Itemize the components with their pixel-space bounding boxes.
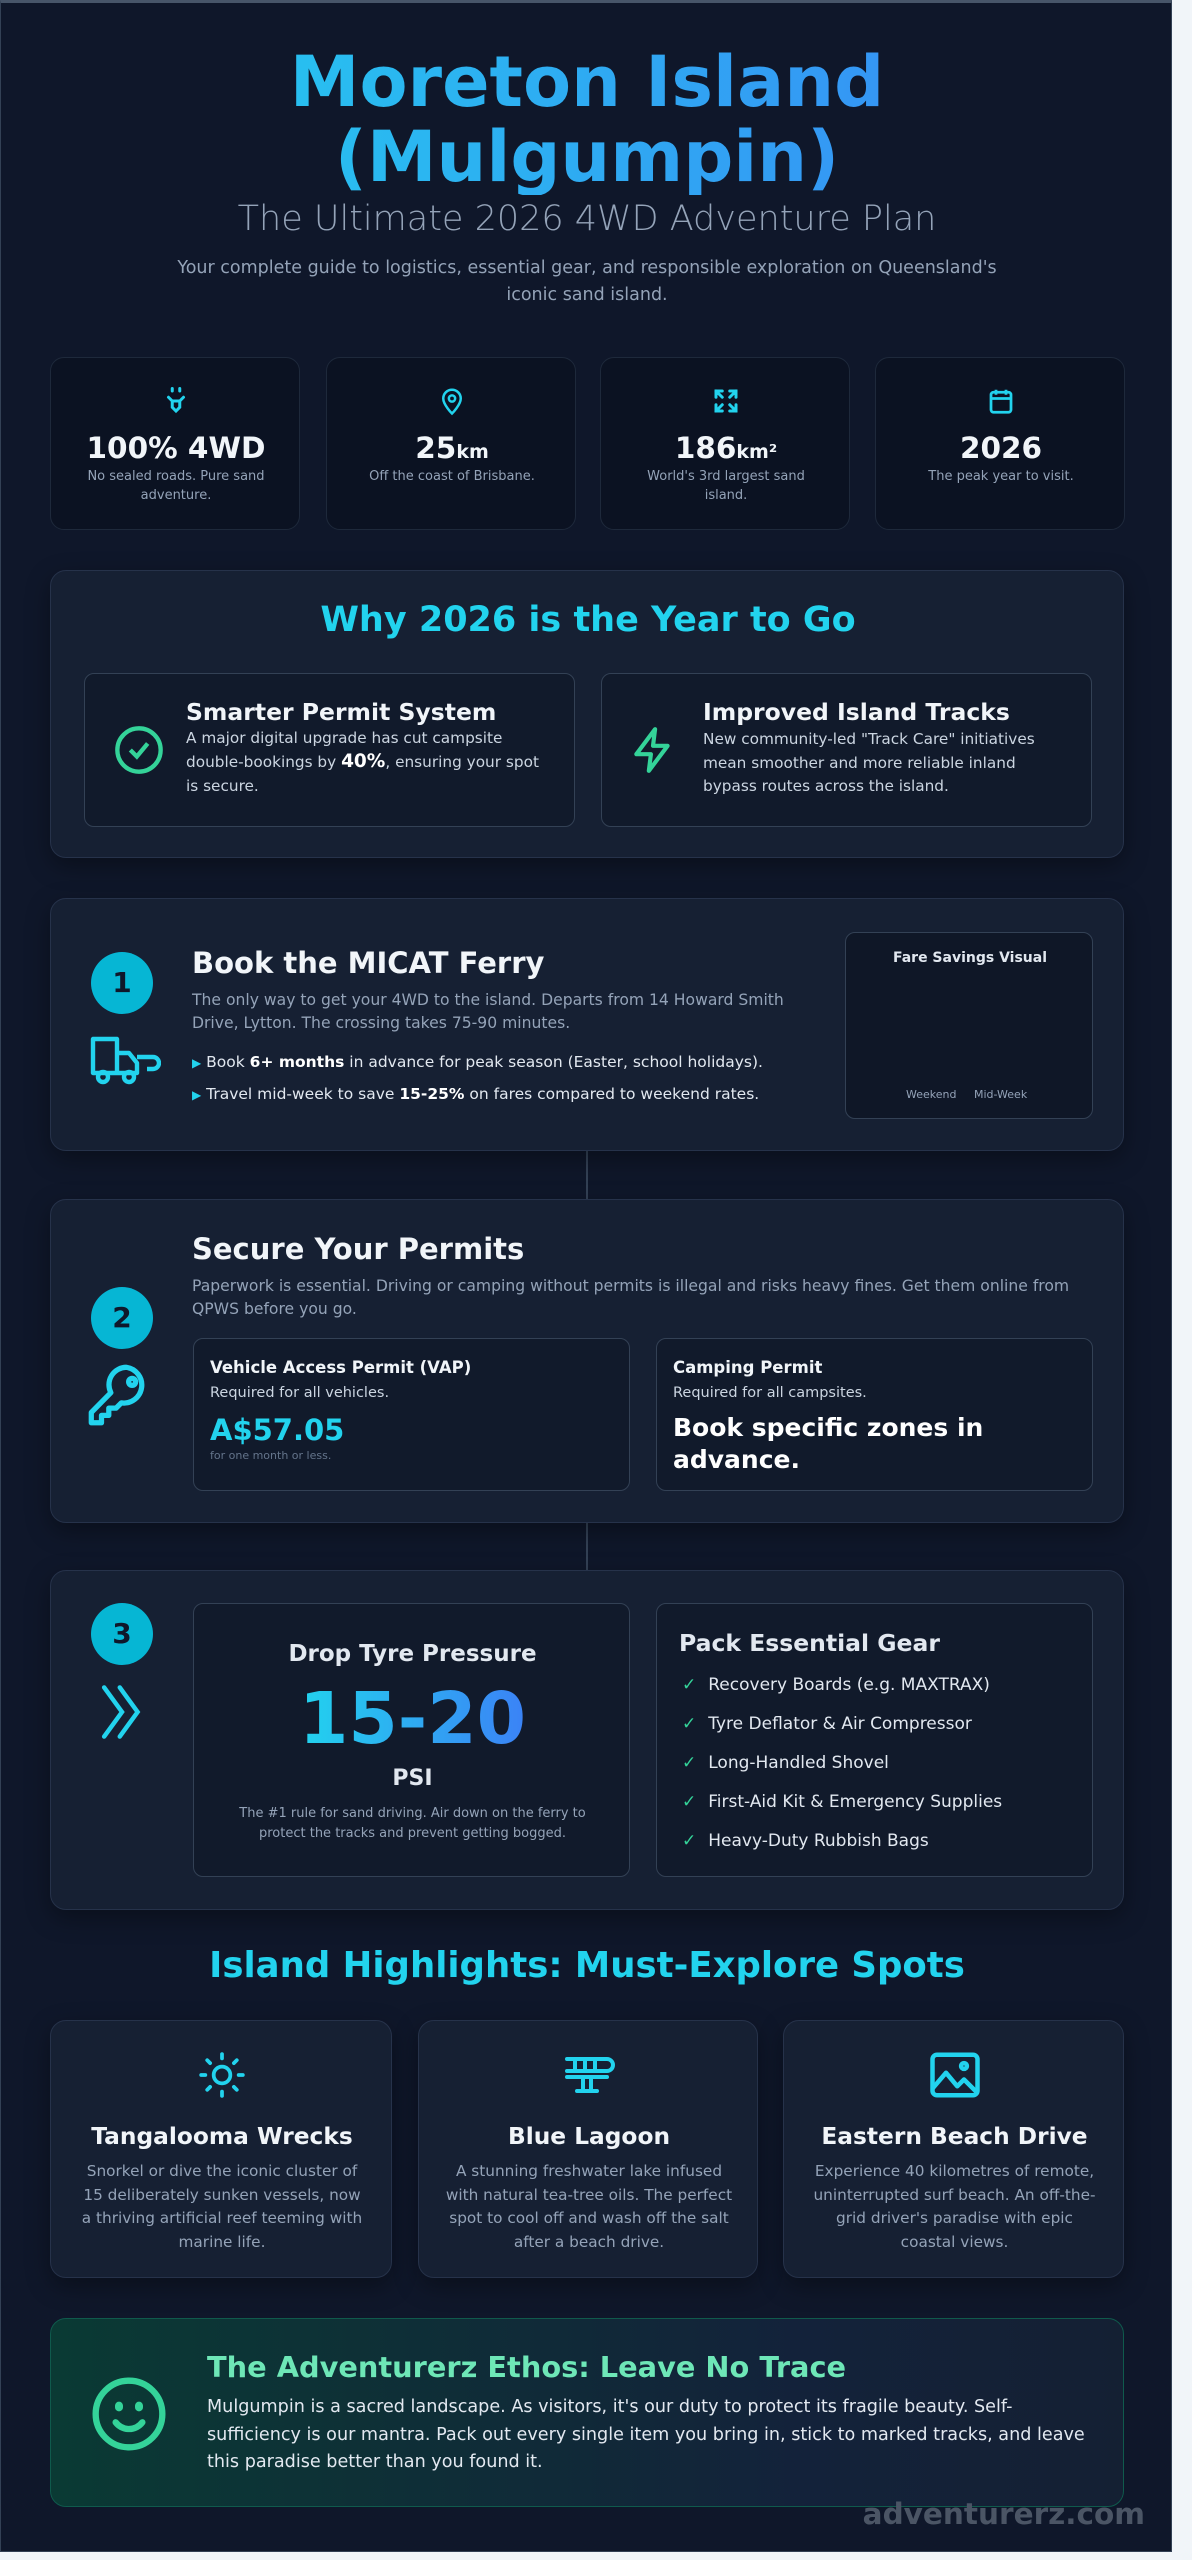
icon: jetty	[565, 2057, 615, 2093]
step number 3: 3	[112, 1617, 132, 1650]
box: gear list: ✓ Recovery Boards (e.g. MAXTRAX)	[682, 1675, 990, 1695]
box: improved tracks	[601, 673, 1092, 827]
stat card: 186km2: World's 3rd largest sand island.	[647, 469, 805, 503]
stat card: 2026: 2026	[960, 431, 1042, 465]
card: Blue Lagoon: Blue Lagoon	[508, 2123, 670, 2150]
box: tyre pressure: PSI	[392, 1766, 433, 1791]
big number: 15-20	[299, 1677, 526, 1760]
icon: truck	[90, 1036, 161, 1084]
card: Tangalooma Wrecks	[50, 2020, 392, 2278]
bullets	[192, 1053, 763, 1103]
box: gear list: ✓ First-Aid Kit & Emergency Supplies	[682, 1792, 1002, 1812]
card: Tangalooma Wrecks: Tangalooma Wrecks	[91, 2123, 353, 2150]
chart: fare savings visual: Fare Savings Visual	[893, 950, 1047, 966]
stat card: 100% 4WD: 100% 4WD	[87, 431, 265, 465]
description: The only way to get your 4WD to the island. Departs from 14 Howard Smith Drive, Lytton. The crossing takes 75-90 minutes.	[192, 991, 784, 1032]
panel: step 2 permits	[50, 1199, 1124, 1523]
box: smarter permit: Smarter Permit System	[186, 698, 496, 726]
subtitle: The Ultimate 2026 4WD Adventure Plan	[238, 199, 936, 239]
box: VAP	[193, 1338, 630, 1491]
bullets: ▶ Book 6+ months in advance for peak season (Easter, school holidays).	[192, 1053, 763, 1071]
box: VAP: A$57.05	[210, 1413, 344, 1447]
stat card: 100% 4WD: No sealed roads. Pure sand adventure.	[87, 469, 265, 503]
box: smarter permit: A major digital upgrade has cut campsite double-bookings by 40%, ensuring your spot is secure.	[186, 729, 539, 795]
title	[1, 45, 1173, 195]
card: Blue Lagoon: A stunning freshwater lake infused with natural tea-tree oils. The perfect spot to cool off and wash off the salt after a beach drive.	[446, 2162, 732, 2250]
icon: calendar	[990, 390, 1012, 414]
stat card: 25km	[326, 357, 576, 530]
panel: ethos: The Adventurerz Ethos: Leave No Trace	[207, 2350, 846, 2384]
card: Tangalooma Wrecks: Snorkel or dive the iconic cluster of 15 deliberately sunken vessels, now a thriving artificial reef teeming with marine life.	[82, 2162, 362, 2250]
step number 2: 2	[112, 1301, 132, 1334]
box: gear list: ✓ Tyre Deflator & Air Compressor	[682, 1714, 972, 1734]
icon: expand	[714, 389, 738, 413]
icon: sun	[199, 2052, 245, 2098]
stat card: 25km: Off the coast of Brisbane.	[369, 469, 535, 484]
heading: Why 2026 is the Year to Go	[320, 600, 856, 640]
panel: step 3 tyres & gear	[50, 1570, 1124, 1910]
stat card: 2026	[875, 357, 1125, 530]
connector lines	[586, 1151, 588, 1199]
panel: ethos: Mulgumpin is a sacred landscape. As visitors, it's our duty to protect its fragile beauty. Self-sufficiency is our mantra. Pack out every single item you bring in, stick to marked tracks, and leave this paradise better than you found it.	[207, 2397, 1085, 2472]
box: gear list: Pack Essential Gear	[679, 1629, 940, 1657]
box: camping permit: Camping Permit	[673, 1358, 822, 1377]
box: tyre pressure	[193, 1603, 630, 1877]
card: Eastern Beach Drive	[783, 2020, 1124, 2278]
box: gear list	[656, 1603, 1093, 1877]
stat card: 186km2: 186km²	[675, 431, 777, 465]
title: (Mulgumpin)	[335, 116, 839, 198]
box: tyre pressure: The #1 rule for sand driving. Air down on the ferry to protect the tracks and prevent getting bogged.	[239, 1806, 586, 1841]
icon: key	[88, 1364, 144, 1426]
title: Moreton Island	[290, 41, 884, 123]
box: gear list: ✓ Heavy-Duty Rubbish Bags	[682, 1831, 929, 1851]
icon: check circle	[115, 726, 163, 774]
box: improved tracks: Improved Island Tracks	[703, 698, 1010, 726]
box: camping permit: Required for all campsites.	[673, 1385, 867, 1401]
chart: fare savings visual: Mid-Week	[974, 1088, 1027, 1101]
box: VAP: Required for all vehicles.	[210, 1385, 389, 1401]
icon: smiley	[92, 2378, 166, 2450]
bullets: ▶ Travel mid-week to save 15-25% on fares compared to weekend rates.	[192, 1085, 759, 1103]
box: camping permit: Book specific zones in advance.	[673, 1413, 983, 1474]
icon: landscape image	[930, 2052, 980, 2098]
box: improved tracks: New community-led "Track Care" initiatives mean smoother and more reliable inland bypass routes across the island.	[703, 730, 1035, 795]
step number 1: 1	[112, 966, 132, 999]
watermark: adventurerz.com	[863, 2497, 1145, 2531]
step number 2	[91, 1287, 153, 1349]
icon: chevrons	[102, 1685, 140, 1739]
chart: fare savings visual: Weekend	[906, 1088, 956, 1101]
panel: ethos	[50, 2318, 1124, 2507]
step number 1	[91, 952, 153, 1014]
card: Eastern Beach Drive: Experience 40 kilometres of remote, uninterrupted surf beach. An off-the-grid driver's paradise with epic coastal views.	[813, 2162, 1096, 2250]
box: VAP: for one month or less.	[210, 1449, 331, 1462]
card: Blue Lagoon	[418, 2020, 758, 2278]
heading: Secure Your Permits	[192, 1232, 524, 1266]
icon: 4wd	[166, 387, 186, 413]
card: Eastern Beach Drive: Eastern Beach Drive	[821, 2123, 1088, 2150]
icon: map pin	[442, 388, 462, 416]
description: Paperwork is essential. Driving or camping without permits is illegal and risks heavy fines. Get them online from QPWS before you go.	[192, 1277, 1069, 1318]
box: VAP: Vehicle Access Permit (VAP)	[210, 1358, 471, 1377]
chart: fare savings visual	[845, 932, 1093, 1119]
heading: island highlights: Island Highlights: Must-Explore Spots	[209, 1945, 965, 1986]
icon: lightning	[634, 727, 670, 773]
panel: why 2026	[50, 570, 1124, 858]
stat card: 25km: 25km	[415, 431, 489, 465]
intro text: Your complete guide to logistics, essential gear, and responsible exploration on Queensland's iconic sand island.	[177, 258, 997, 305]
box: tyre pressure: Drop Tyre Pressure	[288, 1641, 537, 1667]
box: camping permit	[656, 1338, 1093, 1491]
stat card: 100% 4WD	[50, 357, 300, 530]
panel: step 1 ferry	[50, 898, 1124, 1151]
box: gear list: ✓ Long-Handled Shovel	[682, 1753, 889, 1773]
box: smarter permit	[84, 673, 575, 827]
step number 3	[91, 1603, 153, 1665]
stat card: 2026: The peak year to visit.	[928, 469, 1074, 484]
heading: Book the MICAT Ferry	[192, 946, 544, 980]
stat card: 186km2	[600, 357, 850, 530]
